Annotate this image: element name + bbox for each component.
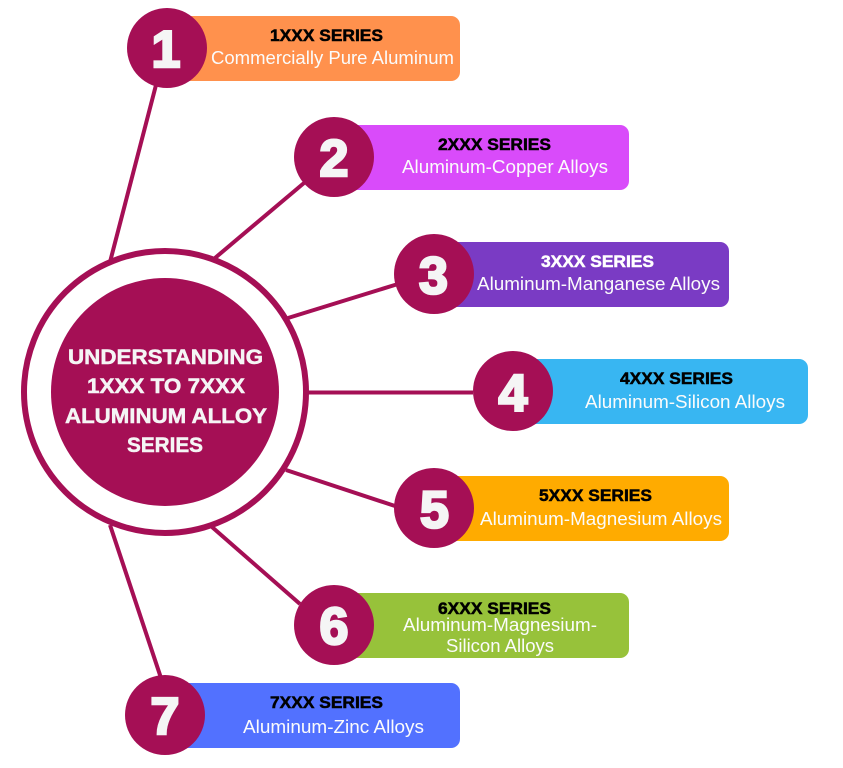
number badge 7: [125, 675, 205, 755]
label bar 7: [165, 683, 460, 748]
heading 7: 7XXX SERIES: [270, 694, 383, 712]
main title: UNDERSTANDING: [68, 346, 263, 369]
item 4: 4XXX series: [473, 351, 808, 431]
heading 2: 2XXX SERIES: [438, 136, 551, 154]
label bar 1: [167, 16, 460, 81]
number badge 4: [473, 351, 553, 431]
label bar 4: [513, 359, 808, 424]
heading 6: 6XXX SERIES: [438, 600, 551, 618]
description 6: Silicon Alloys: [446, 636, 554, 656]
item 3: 3XXX series: [394, 234, 729, 314]
connector lines from hub to numbered nodes: [110, 85, 473, 678]
number badge 3: 3: [419, 248, 448, 306]
hub outer ring: [24, 251, 306, 533]
number badge 1: [127, 8, 207, 88]
number badge 2: [294, 117, 374, 197]
main title: 1XXX TO 7XXX: [87, 375, 245, 398]
number badge 5: [394, 468, 474, 548]
main title: SERIES: [127, 434, 203, 457]
description 3: Aluminum-Manganese Alloys: [477, 274, 720, 294]
item 2: 2XXX series: [294, 117, 629, 197]
number badge 7: 7: [151, 688, 179, 746]
label bar 2: [334, 125, 629, 190]
heading 4: 4XXX SERIES: [620, 370, 733, 388]
number badge 3: [394, 234, 474, 314]
number badge 2: 2: [320, 130, 348, 188]
number badge 6: [294, 585, 374, 665]
hub inner disc: [51, 278, 279, 506]
description 6: [403, 615, 597, 656]
number badge 6: 6: [320, 598, 348, 656]
description 6: Aluminum-Magnesium-: [403, 615, 597, 635]
main title: [65, 346, 267, 457]
label bar 6: [334, 593, 629, 658]
description 1: Commercially Pure Aluminum: [211, 48, 454, 68]
heading 1: 1XXX SERIES: [270, 27, 383, 45]
item 6: 6XXX series: [294, 585, 629, 665]
number badge 5: 5: [420, 482, 449, 540]
description 5: Aluminum-Magnesium Alloys: [480, 509, 722, 529]
item 1: 1XXX series: [127, 8, 460, 88]
label bar 5: [434, 476, 729, 541]
label bar 3: [434, 242, 729, 307]
item 7: 7XXX series: [125, 675, 460, 755]
heading 5: 5XXX SERIES: [539, 487, 652, 505]
central hub: [24, 251, 306, 533]
heading 3: 3XXX SERIES: [541, 253, 654, 271]
item 5: 5XXX series: [394, 468, 729, 548]
main title: ALUMINUM ALLOY: [65, 405, 267, 428]
description 7: Aluminum-Zinc Alloys: [243, 717, 424, 737]
description 2: Aluminum-Copper Alloys: [402, 157, 608, 177]
number badge 1: 1: [152, 21, 180, 79]
number badge 4: 4: [499, 365, 528, 423]
description 4: Aluminum-Silicon Alloys: [585, 392, 785, 412]
